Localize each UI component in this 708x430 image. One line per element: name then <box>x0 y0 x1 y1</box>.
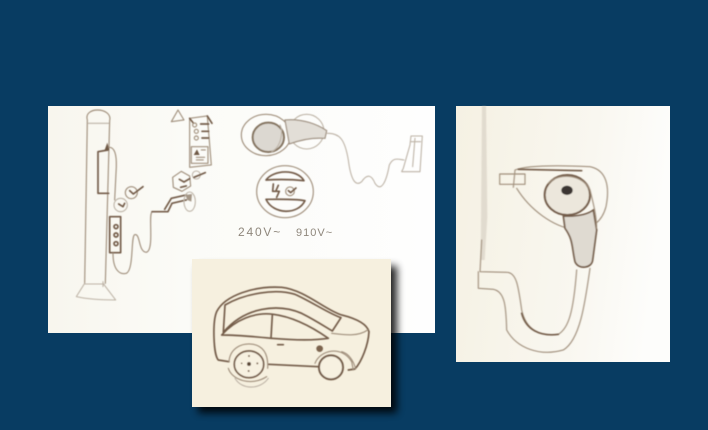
panel: wall charger side view <box>456 106 670 362</box>
handwritten voltage labels: 240V~ <box>238 225 282 239</box>
connector and socket sketches <box>241 114 422 218</box>
panel: charging station sketches <box>48 106 435 333</box>
panel shadow <box>198 266 397 413</box>
panel: car sketch <box>192 259 391 407</box>
handwritten voltage labels: 910V~ <box>296 227 333 239</box>
charger and cable drawing <box>478 106 608 352</box>
handwritten voltage labels <box>238 225 333 239</box>
charging post with cable <box>76 110 212 300</box>
car drawing <box>214 287 369 387</box>
